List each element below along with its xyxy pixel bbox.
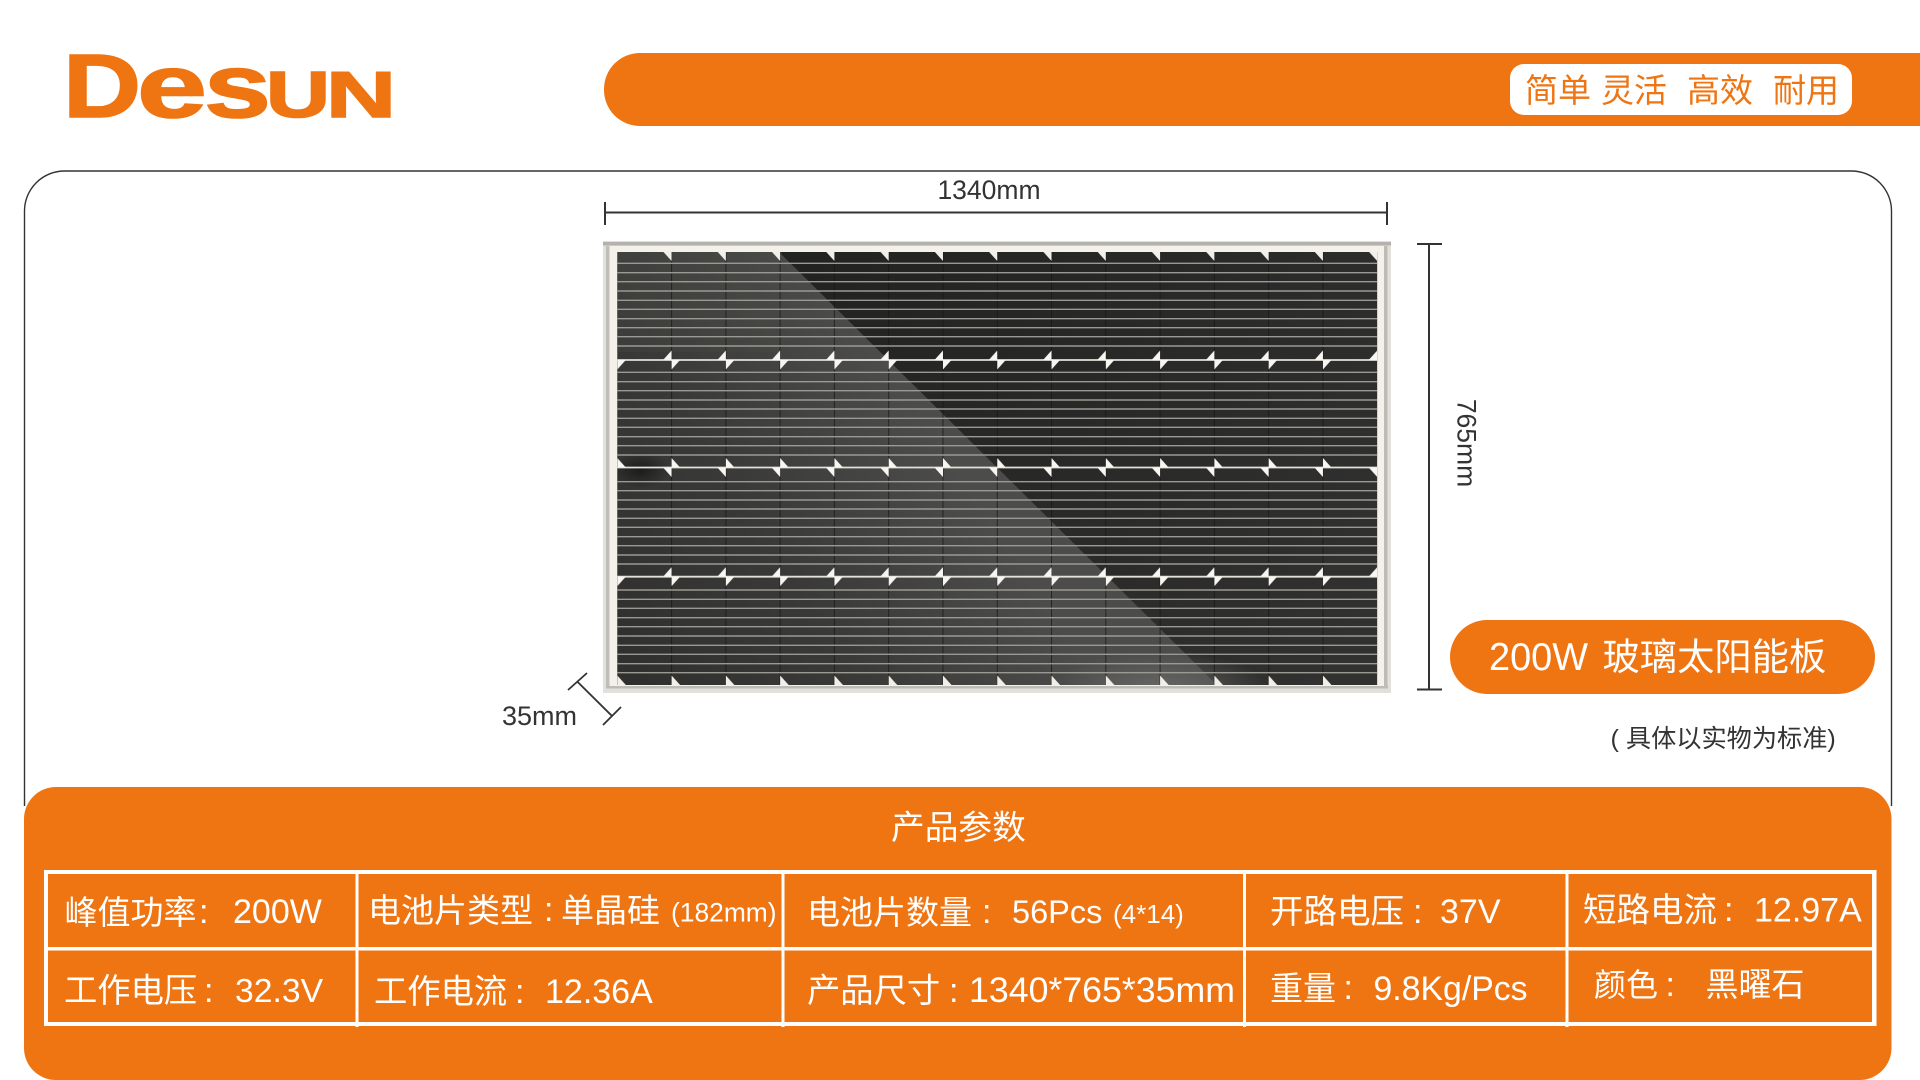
product name pill	[1450, 620, 1875, 694]
working current	[374, 973, 653, 1011]
working current: 12.36A	[545, 973, 653, 1011]
logo: DeSUN: D	[63, 37, 141, 137]
header bar with slogan	[604, 53, 1920, 126]
working current: 工作电流	[374, 974, 507, 1011]
table values	[64, 891, 1862, 1011]
solar panel	[603, 241, 1391, 728]
logo: DeSUN: s	[204, 37, 271, 137]
working voltage: :	[204, 972, 213, 1010]
cell count: 56Pcs	[1012, 894, 1102, 930]
open circuit voltage: :	[1413, 893, 1422, 931]
product size	[807, 971, 1235, 1010]
peak power: 200W	[233, 893, 322, 931]
open circuit voltage: 37V	[1440, 893, 1501, 931]
product size: :	[949, 972, 958, 1010]
slogan pill: 灵活	[1601, 72, 1667, 109]
colour: 黑曜石	[1706, 966, 1804, 1003]
parameters title: 产品参数	[891, 809, 1026, 847]
disclaimer note: ( 具体以实物为标准)	[1610, 725, 1836, 753]
peak power: 峰值功率	[64, 894, 196, 931]
slogan pill: 高效	[1687, 72, 1753, 109]
short circuit current: :	[1724, 891, 1733, 929]
parameters panel	[24, 787, 1892, 1080]
cell count: :	[982, 893, 991, 931]
weight: :	[1344, 969, 1353, 1007]
short circuit current: 12.97A	[1754, 892, 1862, 930]
cell type: :	[544, 891, 553, 929]
product name pill: 玻璃太阳能板	[1602, 636, 1826, 678]
cell count	[807, 893, 1184, 931]
outlined product panel	[24, 171, 1892, 806]
parameters table grid	[44, 870, 1876, 1027]
product size: 1340*765*35mm	[969, 971, 1235, 1010]
logo: DeSUN: N	[326, 58, 396, 131]
width dimension: 1340mm	[605, 175, 1387, 225]
working voltage: 工作电压	[64, 973, 197, 1010]
peak power	[64, 893, 322, 931]
colour	[1594, 966, 1804, 1004]
weight: 重量	[1270, 970, 1336, 1007]
peak power: :	[199, 893, 208, 931]
slogan pill	[1510, 64, 1852, 115]
cell type: (182mm)	[671, 898, 777, 928]
working voltage	[64, 972, 324, 1010]
short circuit current: 短路电流	[1583, 892, 1717, 930]
depth dimension: 35mm: 35mm	[502, 701, 577, 731]
panel frame	[603, 241, 1391, 693]
cell count: (4*14)	[1113, 899, 1184, 929]
working current: :	[515, 973, 524, 1011]
cell type: 单晶硅	[561, 892, 660, 929]
cell type: 电池片类型	[368, 892, 533, 929]
slogan pill: 简单	[1525, 72, 1591, 109]
depth dimension: 35mm	[502, 673, 621, 731]
logo: DeSUN: e	[137, 37, 207, 137]
colour: :	[1666, 966, 1675, 1004]
colour: 颜色	[1594, 967, 1658, 1003]
cell count: 电池片数量	[807, 894, 972, 931]
short circuit current	[1583, 891, 1862, 930]
logo: DeSUN	[63, 37, 396, 137]
photovoltaic cells	[617, 252, 1378, 685]
cell type	[368, 891, 777, 929]
weight	[1270, 969, 1528, 1008]
weight: 9.8Kg/Pcs	[1374, 970, 1528, 1008]
working voltage: 32.3V	[235, 972, 324, 1010]
width dimension: 1340mm: 1340mm	[937, 175, 1041, 205]
open circuit voltage: 开路电压	[1270, 894, 1404, 931]
logo: DeSUN: U	[266, 58, 330, 131]
slogan pill: 耐用	[1773, 72, 1839, 109]
height dimension: 765mm	[1417, 244, 1482, 690]
height dimension: 765mm: 765mm	[1452, 399, 1482, 487]
product name pill: 200W	[1489, 636, 1588, 679]
product size: 产品尺寸	[807, 973, 940, 1010]
open circuit voltage	[1270, 893, 1501, 931]
